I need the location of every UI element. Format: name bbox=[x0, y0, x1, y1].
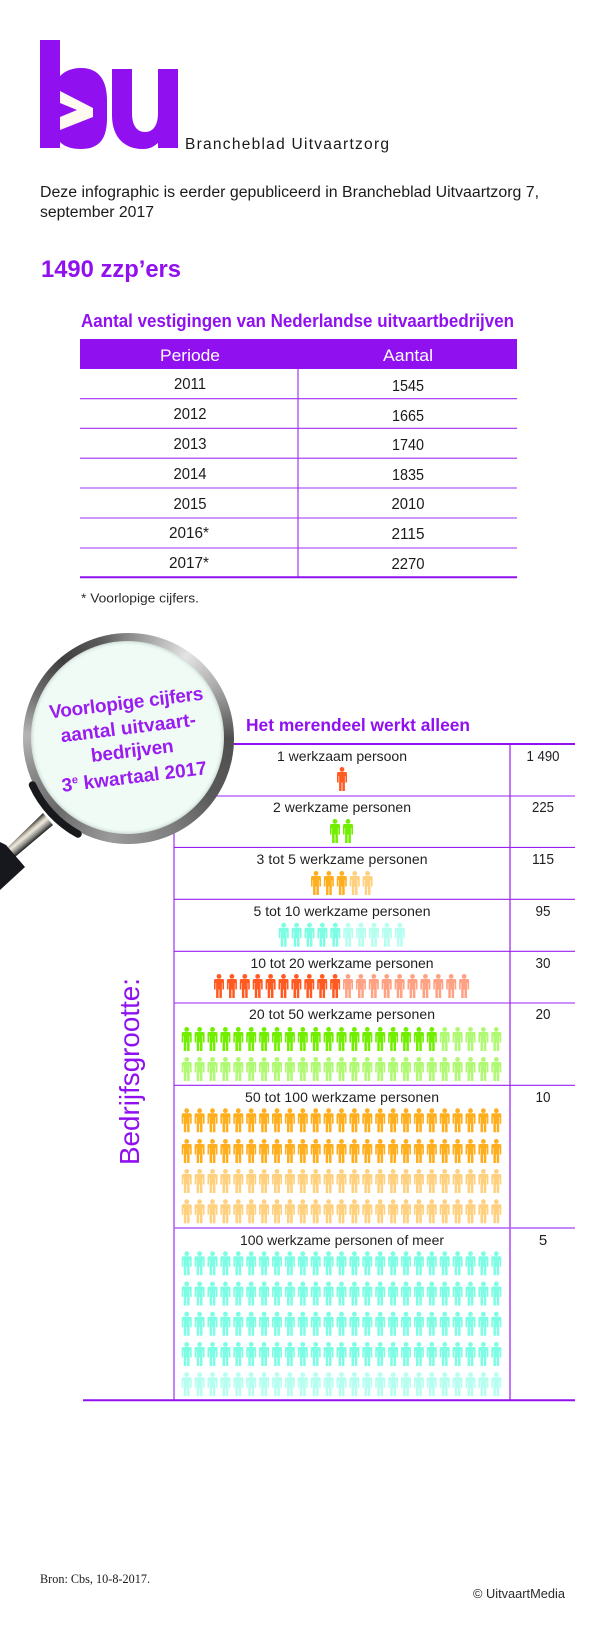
table rows: 1545 bbox=[392, 378, 424, 395]
row: 20 tot 50 werkzame personen: 20 bbox=[536, 1006, 550, 1023]
logo: bu bbox=[40, 40, 178, 149]
row: 3 tot 5 werkzame personen: 3 tot 5 werkzame personen bbox=[256, 851, 428, 867]
row: 50 tot 100 werkzame personen: 50 tot 100 werkzame personen bbox=[245, 1089, 439, 1105]
row: 10 tot 20 werkzame personen bbox=[214, 955, 550, 998]
table rows: 2014 bbox=[174, 466, 207, 483]
table rows: 1665 bbox=[392, 408, 424, 425]
row: 10 tot 20 werkzame personen: 30 bbox=[536, 955, 550, 972]
row: 50 tot 100 werkzame personen: 10 bbox=[536, 1089, 550, 1106]
row: 1 werkzaam persoon bbox=[277, 748, 560, 791]
table rows: 2011 bbox=[174, 376, 206, 393]
row: 2 werkzame personen: 225 bbox=[532, 799, 554, 816]
lens text: aantal uitvaart- bbox=[60, 710, 197, 747]
row: 5 tot 10 werkzame personen: 95 bbox=[536, 903, 550, 920]
table rows bbox=[169, 376, 425, 573]
lens text: 3 bbox=[61, 775, 74, 797]
footnote: * Voorlopige cijfers. bbox=[81, 590, 199, 606]
row: 1 werkzaam persoon: 1 490 bbox=[526, 748, 560, 765]
row: 100 werkzame personen of meer: 5 bbox=[539, 1232, 547, 1249]
row: 1 werkzaam persoon: 1 werkzaam persoon bbox=[277, 748, 407, 764]
logo wordmark: Brancheblad Uitvaartzorg bbox=[185, 136, 389, 153]
row: 50 tot 100 werkzame personen bbox=[182, 1089, 550, 1223]
heading: het merendeel werkt alleen: Het merendeel werkt alleen bbox=[246, 715, 470, 735]
copyright: © UitvaartMedia bbox=[473, 1587, 565, 1601]
row: 5 tot 10 werkzame personen: 5 tot 10 werkzame personen bbox=[254, 903, 430, 919]
table heading: Aantal vestigingen van Nederlandse uitvaartbedrijven bbox=[81, 311, 514, 331]
table rows: 1740 bbox=[392, 437, 424, 454]
heading: 1490 zzp'ers: 1490 zzp’ers bbox=[41, 256, 181, 283]
table rows: 2115 bbox=[392, 526, 425, 543]
row: 2 werkzame personen: 2 werkzame personen bbox=[273, 799, 411, 815]
table header: Periode bbox=[160, 346, 220, 365]
row: 5 tot 10 werkzame personen bbox=[254, 903, 550, 947]
lens text: Voorlopige cijfers bbox=[48, 684, 205, 723]
table rows: 1835 bbox=[392, 467, 424, 484]
source note: Bron: Cbs, 10-8-2017. bbox=[40, 1571, 150, 1586]
vertical label: bedrijfsgrootte: Bedrijfsgrootte: bbox=[114, 978, 145, 1165]
row: 3 tot 5 werkzame personen bbox=[256, 851, 554, 895]
table rows: 2013 bbox=[174, 436, 207, 453]
table rows: 2010 bbox=[392, 496, 425, 513]
table rows: 2012 bbox=[174, 406, 207, 423]
table rows: 2017* bbox=[169, 555, 209, 572]
row: 2 werkzame personen bbox=[273, 799, 554, 843]
table: bedrijfsgrootte bbox=[83, 744, 575, 1400]
table: vestigingen bbox=[80, 339, 517, 577]
intro text: Deze infographic is eerder gepubliceerd in Brancheblad Uitvaartzorg 7, bbox=[40, 184, 539, 201]
magnifier callout bbox=[0, 633, 234, 890]
table rows: 2016* bbox=[169, 525, 209, 542]
intro text bbox=[40, 184, 539, 221]
row: 100 werkzame personen of meer bbox=[182, 1232, 547, 1396]
row: 3 tot 5 werkzame personen: 115 bbox=[532, 851, 554, 868]
lens ring bbox=[23, 633, 234, 844]
row: 10 tot 20 werkzame personen: 10 tot 20 werkzame personen bbox=[250, 955, 434, 971]
lens glass bbox=[31, 641, 224, 834]
lens text: kwartaal 2017 bbox=[77, 758, 208, 795]
table header bbox=[80, 339, 517, 369]
table rows: 2270 bbox=[392, 556, 425, 573]
table header: Aantal bbox=[383, 346, 433, 365]
row: 20 tot 50 werkzame personen bbox=[182, 1006, 550, 1081]
row: 100 werkzame personen of meer: 100 werkzame personen of meer bbox=[240, 1232, 444, 1248]
table rows: 2015 bbox=[174, 496, 207, 513]
intro text: september 2017 bbox=[40, 204, 154, 221]
lens text: bedrijven bbox=[90, 736, 175, 767]
row: 20 tot 50 werkzame personen: 20 tot 50 werkzame personen bbox=[249, 1006, 435, 1022]
lens text: e bbox=[71, 774, 79, 787]
